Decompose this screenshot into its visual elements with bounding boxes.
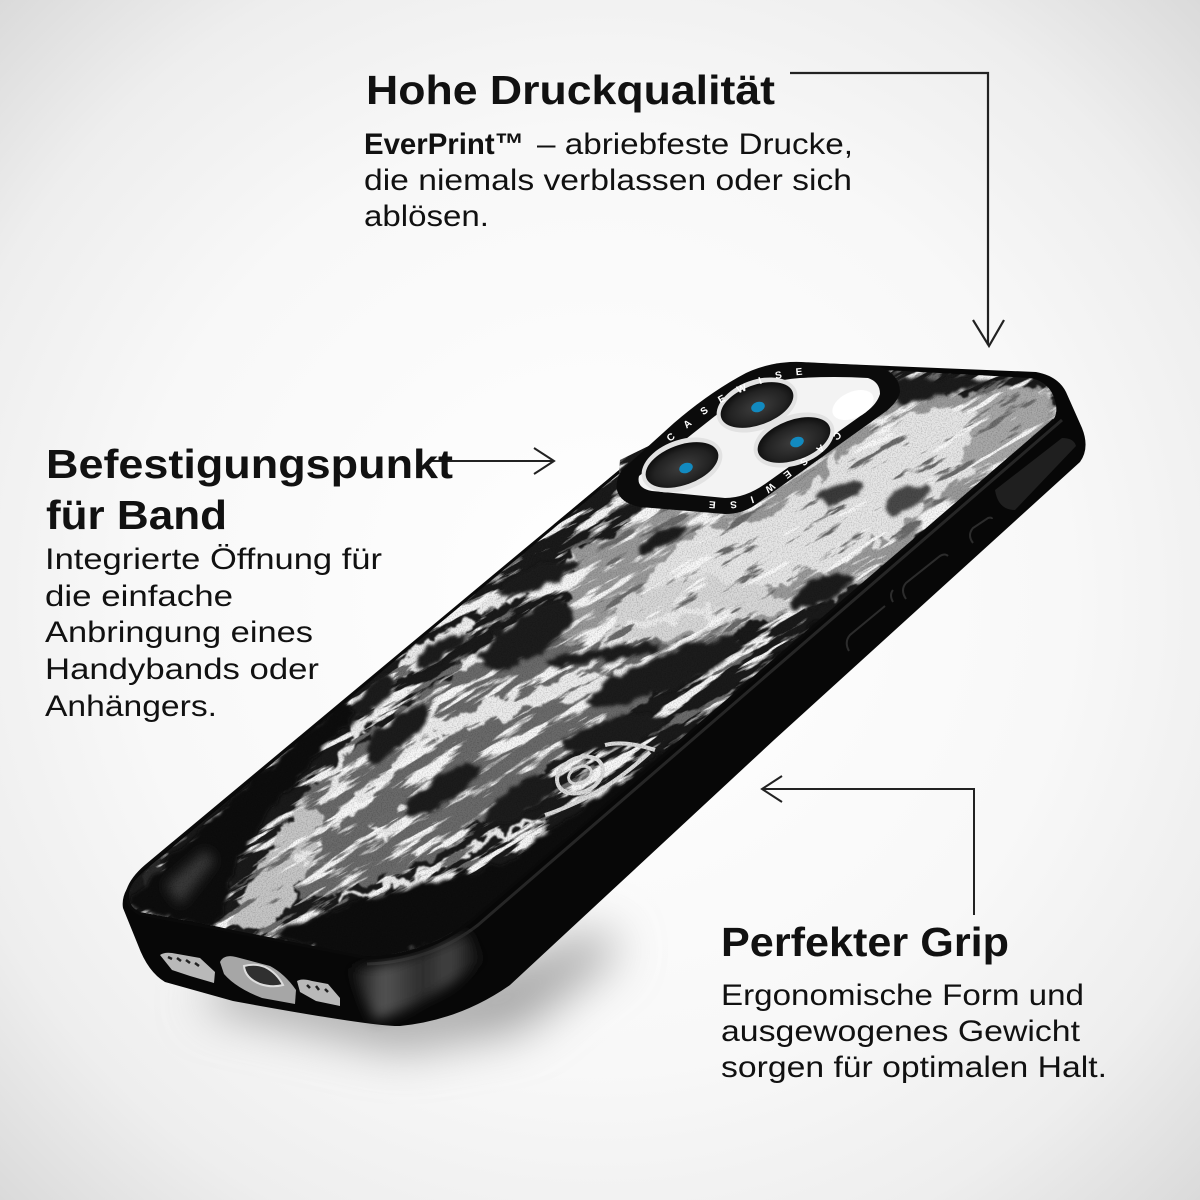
side strap opening bbox=[995, 438, 1076, 510]
heading: grip: Perfekter Grip bbox=[721, 919, 1009, 965]
brand lettering lower: CASEWISE bbox=[709, 432, 841, 508]
body: strap attachment: Anbringung eines bbox=[45, 616, 313, 649]
bottom speaker left bbox=[160, 953, 215, 983]
heading: strap attachment: Befestigungspunkt bbox=[46, 441, 453, 487]
marble grain bbox=[142, 370, 1056, 946]
body: print quality: EverPrint™ bbox=[364, 128, 524, 161]
body: print quality: die niemals verblassen oder sich bbox=[364, 164, 852, 197]
glass window bbox=[639, 377, 880, 498]
body: strap attachment bbox=[45, 543, 382, 723]
heading: print quality: Hohe Druckqualität bbox=[366, 67, 775, 113]
corner smear bbox=[165, 850, 215, 905]
text block: grip bbox=[721, 919, 1107, 1084]
phone drop shadow bbox=[200, 930, 620, 1050]
panel edge lines bbox=[127, 420, 1054, 958]
heading: strap attachment bbox=[46, 441, 453, 538]
body: strap attachment: Integrierte Öffnung für bbox=[45, 543, 382, 576]
left edge dark strip bbox=[125, 705, 355, 930]
body: grip: Ergonomische Form und bbox=[721, 979, 1084, 1012]
marble print bbox=[129, 370, 1056, 954]
bottom speaker right bbox=[297, 980, 340, 1006]
charging port bbox=[220, 956, 296, 1004]
lens left bbox=[634, 427, 730, 503]
arrow: print quality bbox=[790, 73, 1004, 346]
body: strap attachment: Anhängers. bbox=[45, 690, 217, 723]
lens top bbox=[709, 367, 805, 443]
marble grey washes bbox=[140, 385, 1055, 915]
body: strap attachment: Handybands oder bbox=[45, 653, 319, 686]
side lip highlight bbox=[367, 420, 1062, 964]
text block: print quality bbox=[364, 67, 853, 233]
arrow: strap attachment bbox=[430, 448, 554, 474]
body: print quality bbox=[364, 128, 853, 233]
marble dark pools bbox=[337, 378, 1000, 835]
flash bbox=[828, 384, 878, 426]
phone case bbox=[122, 362, 1086, 1026]
marble fine veins bbox=[130, 370, 1056, 952]
body: grip bbox=[721, 979, 1107, 1084]
marble light masses bbox=[225, 390, 1050, 935]
marble crossing veins bbox=[146, 375, 1044, 938]
bottom right dark zone bbox=[270, 620, 840, 965]
marble base bbox=[129, 370, 1056, 946]
case body silhouette bbox=[123, 362, 1086, 1026]
camera island bbox=[616, 362, 900, 514]
swirl spot bbox=[545, 743, 655, 815]
text block: strap attachment bbox=[45, 441, 453, 723]
bottom corner sheen bbox=[350, 932, 482, 1020]
side buttons bbox=[847, 518, 992, 651]
body: grip: ausgewogenes Gewicht bbox=[721, 1015, 1081, 1048]
body: grip: sorgen für optimalen Halt. bbox=[721, 1051, 1107, 1084]
body: print quality: ablösen. bbox=[364, 200, 489, 233]
heading: strap attachment: für Band bbox=[46, 492, 227, 538]
lens right bbox=[746, 402, 842, 478]
body: print quality: – abriebfeste Drucke, bbox=[537, 128, 853, 161]
body: strap attachment: die einfache bbox=[45, 580, 233, 613]
marble white streaks bbox=[300, 565, 730, 900]
brand lettering: CASEWISE bbox=[667, 368, 802, 440]
marble dark cracks bbox=[132, 370, 1044, 954]
island ring bbox=[617, 362, 900, 514]
arrow: grip bbox=[762, 776, 974, 915]
